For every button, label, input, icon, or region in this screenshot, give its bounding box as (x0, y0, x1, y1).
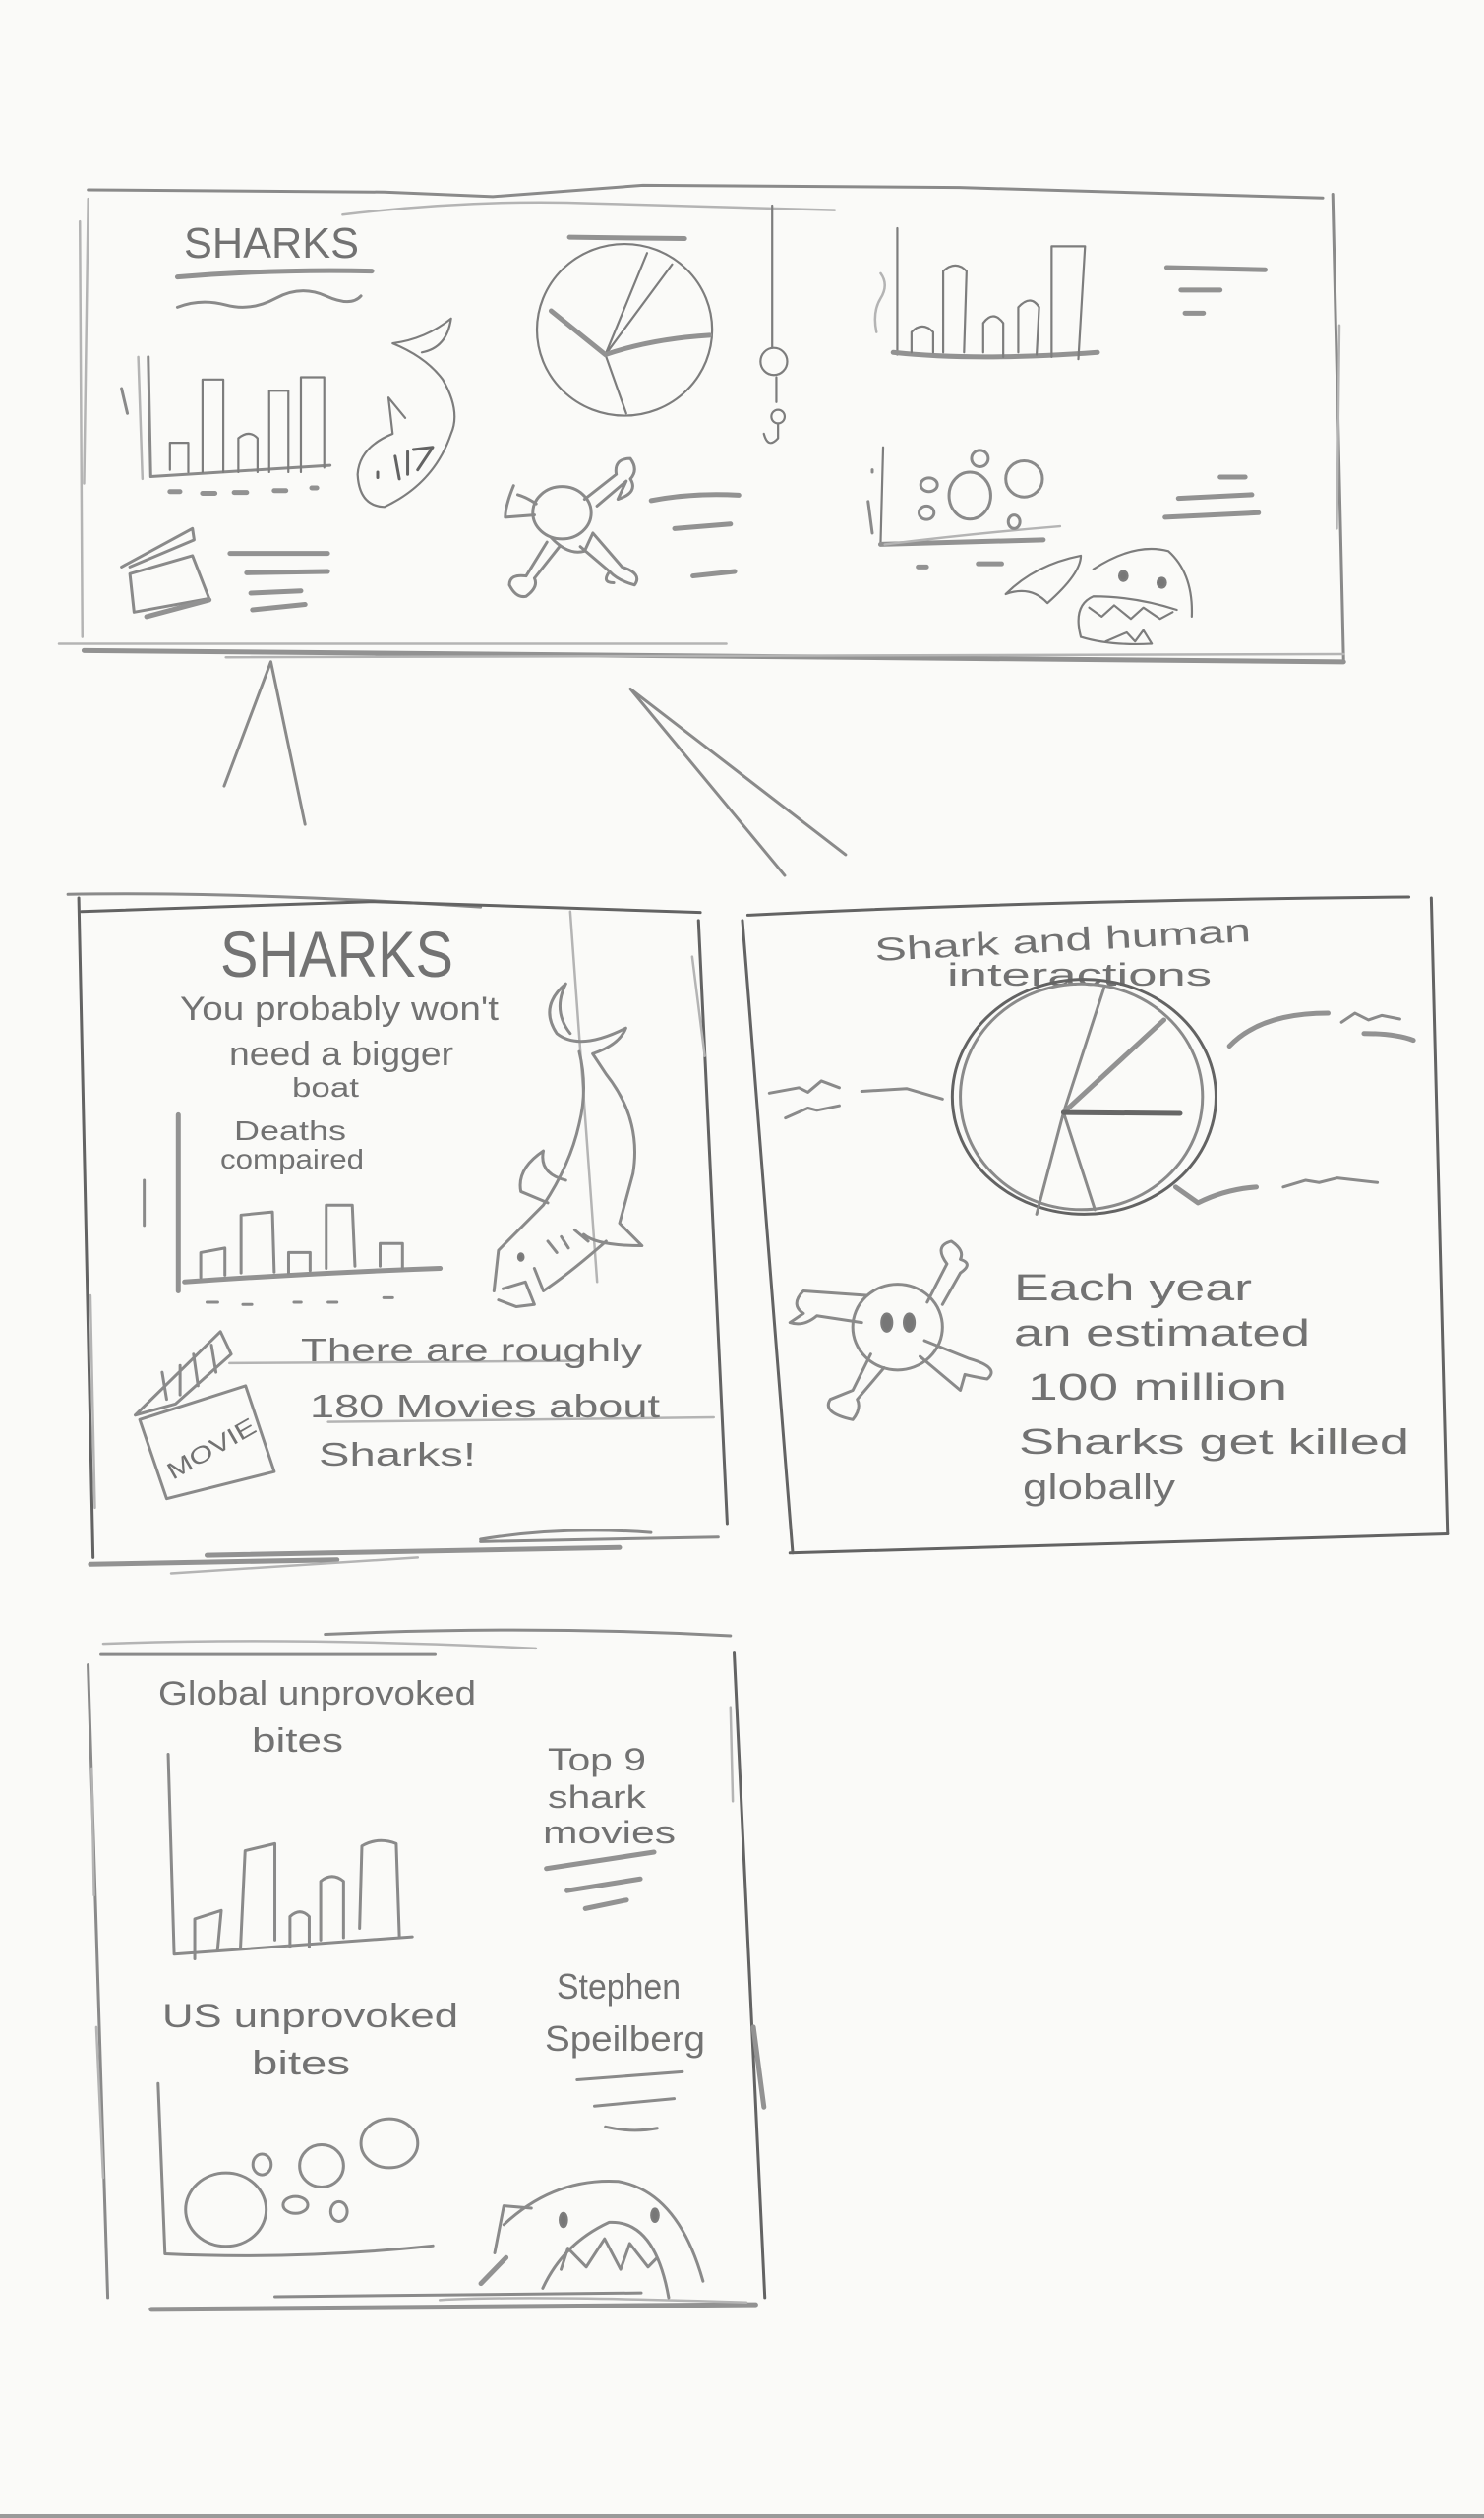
chart title: global (158, 1675, 476, 1760)
text: killed fact (1014, 1268, 1409, 1507)
text: top shark movies: Top 9 (548, 1742, 646, 1777)
panel: shark and human interactions (742, 897, 1448, 1553)
panel frame (742, 897, 1448, 1553)
icon: shark face (1006, 549, 1192, 644)
arrow: to left panel (224, 662, 305, 824)
icon: shark face (481, 2182, 703, 2298)
chart title: US: US unprovoked (162, 1998, 458, 2035)
subheading: You probably won't (180, 990, 500, 1028)
heading: SHARKS: SHARKS (220, 918, 453, 990)
text: killed fact: Each year (1014, 1268, 1252, 1309)
chart title: global: Global unprovoked (158, 1675, 476, 1712)
title: SHARKS: SHARKS (184, 219, 359, 268)
text: top shark movies (543, 1742, 676, 1908)
pie chart (952, 980, 1216, 1214)
page bottom edge (0, 2514, 1484, 2518)
icon: shark fish (358, 319, 454, 507)
callouts (769, 1013, 1413, 1203)
text: killed fact: an estimated (1014, 1313, 1310, 1354)
icon: skull and crossbones (505, 458, 739, 597)
title underlines (177, 270, 372, 307)
icon: fishing hook (760, 206, 787, 443)
panel: overview sketch (59, 185, 1343, 662)
panel: unprovoked bites and movies (89, 1630, 765, 2309)
heading (873, 912, 1252, 992)
text: top shark movies: shark (548, 1779, 647, 1815)
bubble chart (868, 448, 1259, 567)
bar chart, top right (875, 228, 1265, 359)
text: movies fact (301, 1332, 660, 1472)
subheading (180, 990, 500, 1103)
text: Stephen Speilberg (545, 1966, 705, 2130)
subheading: need a bigger (229, 1036, 453, 1073)
icon: movie clapperboard (136, 1332, 274, 1499)
chart title: US: bites (252, 2045, 350, 2082)
pie chart (537, 237, 712, 416)
text: killed fact: globally (1023, 1467, 1175, 1507)
bubble chart: US bites (158, 2083, 433, 2255)
icon: skull and crossbones (790, 1241, 991, 1419)
chart title: US (162, 1998, 458, 2082)
panel: sharks title and deaths compared (68, 894, 727, 1573)
text: movies fact: Sharks! (319, 1436, 476, 1472)
arrow: to right panel (630, 689, 846, 875)
chart title (220, 1115, 364, 1174)
text: killed fact: 100 million (1028, 1367, 1287, 1409)
text: Stephen Speilberg: Stephen (557, 1966, 681, 2007)
panel frame (89, 1630, 765, 2309)
heading: Shark and human (873, 912, 1252, 968)
heading: interactions (947, 957, 1212, 992)
text: movies fact: There are roughly (301, 1332, 643, 1368)
icon: clapperboard with text lines (122, 528, 327, 617)
icon: diving shark (494, 984, 642, 1307)
chart title: global: bites (252, 1722, 343, 1760)
text: killed fact: Sharks get killed (1019, 1421, 1409, 1462)
bar chart: deaths compared (145, 1114, 441, 1304)
icon: movie clapperboard: MOVIE (162, 1413, 261, 1485)
text: top shark movies: movies (543, 1815, 676, 1850)
bar chart (122, 357, 330, 494)
text: Stephen Speilberg: Speilberg (545, 2018, 705, 2059)
bar chart: global bites (168, 1754, 412, 1959)
subheading: boat (292, 1072, 359, 1103)
overview frame (59, 185, 1343, 662)
text: movies fact: 180 Movies about (310, 1388, 660, 1424)
panel frame (68, 894, 727, 1573)
chart title: compaired (220, 1144, 364, 1174)
chart title: Deaths (234, 1115, 346, 1146)
